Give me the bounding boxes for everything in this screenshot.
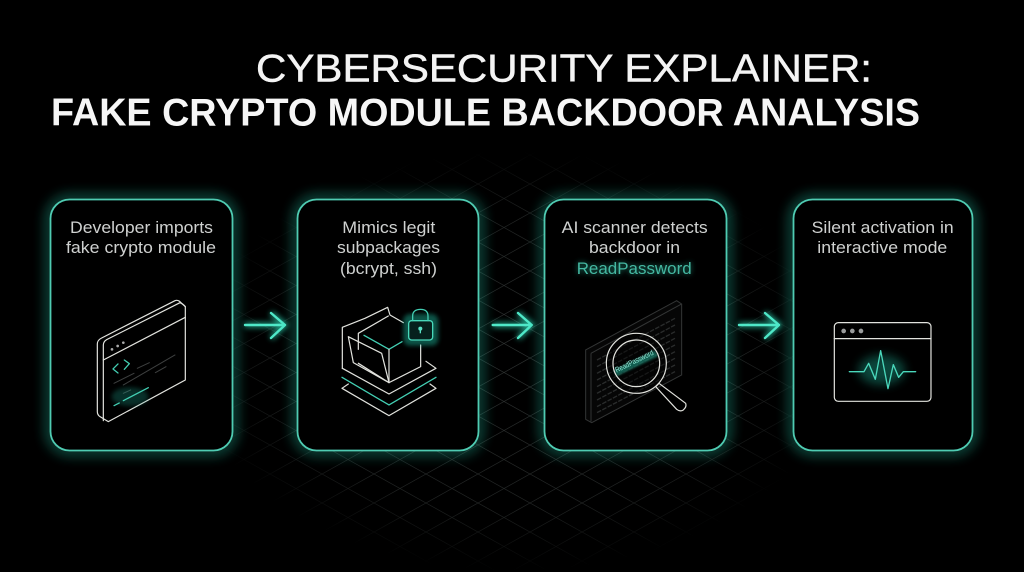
title: FAKE CRYPTO MODULE BACKDOOR ANALYSIS	[51, 92, 920, 134]
text: step 2 label: subpackages	[337, 238, 440, 257]
icon: magnifier over code document: ReadPassword	[614, 348, 655, 374]
panel: step 1 developer imports	[50, 199, 233, 451]
arrow: step 3 to 4	[739, 313, 779, 338]
text: step 3 label	[562, 218, 708, 278]
icon: isometric code window	[97, 300, 185, 422]
panel: step 4 silent activation	[793, 199, 973, 451]
panel: step 3 AI scanner	[544, 199, 727, 451]
title: CYBERSECURITY EXPLAINER:	[256, 48, 872, 90]
text: step 2 label: Mimics legit	[342, 218, 436, 237]
icon: terminal window with pulse	[834, 323, 931, 401]
icon: folder cube and padlock	[342, 307, 438, 416]
text: step 1 label	[66, 218, 216, 257]
text: step 3 label: ReadPassword	[577, 259, 692, 278]
text: step 4 label: Silent activation in	[812, 218, 954, 237]
arrow: step 1 to 2	[245, 313, 285, 338]
title	[51, 48, 920, 134]
text: step 4 label	[812, 218, 954, 257]
arrow: step 2 to 3	[493, 313, 532, 338]
text: step 3 label: AI scanner detects	[562, 218, 708, 237]
text: step 1 label: fake crypto module	[66, 238, 216, 257]
text: step 2 label	[337, 218, 440, 278]
text: step 3 label: backdoor in	[589, 238, 680, 257]
text: step 4 label: interactive mode	[817, 238, 947, 257]
icon: magnifier over code document	[586, 301, 686, 423]
text: step 1 label: Developer imports	[70, 218, 213, 237]
text: step 2 label: (bcrypt, ssh)	[340, 259, 437, 278]
panel: step 2 mimics subpackages	[297, 199, 479, 451]
text: step 3 label: ReadPassword	[577, 259, 692, 278]
